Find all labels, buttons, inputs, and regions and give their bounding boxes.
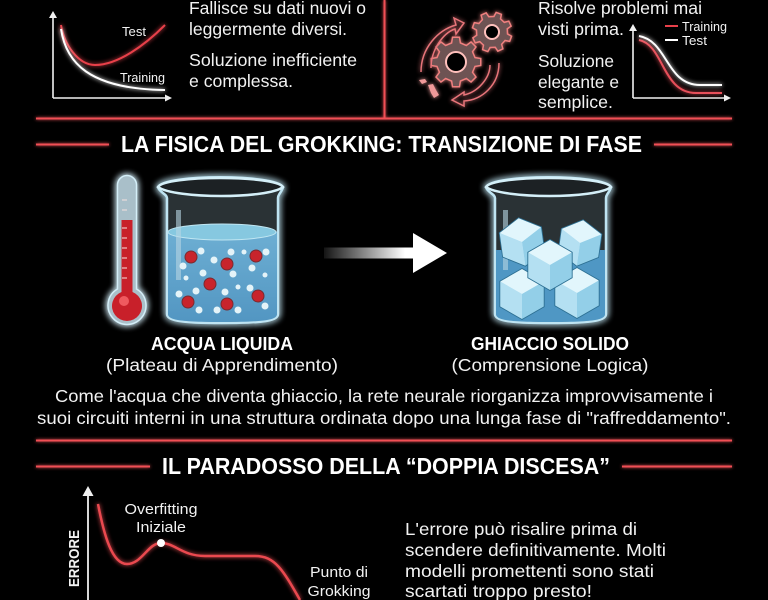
panel: grokking <box>419 0 731 112</box>
label: grokking point <box>308 564 370 600</box>
label: grokking point: Punto di <box>310 564 368 581</box>
axis label: error: ERRORE <box>66 530 83 587</box>
arrow: phase transition <box>324 233 447 273</box>
chart: training and test convergence: Training <box>682 19 727 34</box>
chart: test vs training overfitting: Training <box>120 70 165 85</box>
label: liquid water: (Plateau di Apprendimento) <box>106 355 338 375</box>
label: initial overfitting: Overfitting <box>124 501 198 518</box>
text: analogy paragraph: Come l'acqua che diventa ghiaccio, la rete neurale riorganizza improvvisamente i <box>55 386 713 406</box>
text: double descent explanation: L'errore può risalire prima di <box>405 519 637 539</box>
ice cubes <box>498 215 603 319</box>
label: solid ice: (Comprensione Logica) <box>452 355 648 375</box>
text: overfitting description <box>189 0 366 91</box>
icon: thermometer <box>108 176 146 324</box>
text: grokking description: semplice. <box>538 92 613 112</box>
label: initial overfitting <box>124 501 198 536</box>
icon: gears with arrows <box>419 7 517 106</box>
text: grokking description: elegante e <box>538 72 619 92</box>
chart: training and test convergence <box>629 19 731 102</box>
text: grokking description <box>538 0 702 112</box>
label: liquid water <box>106 334 338 375</box>
water <box>168 226 277 322</box>
text: grokking description: visti prima. <box>538 19 624 39</box>
text: overfitting description: Soluzione inefficiente <box>189 50 357 70</box>
label: solid ice: GHIACCIO SOLIDO <box>471 334 629 354</box>
panel: overfitting <box>49 0 366 102</box>
text: overfitting description: leggermente diversi. <box>189 19 347 39</box>
icon: beaker of ice cubes <box>486 177 611 323</box>
error curve <box>98 504 300 600</box>
frozen water <box>496 250 605 322</box>
text: double descent explanation <box>405 519 666 600</box>
heading: physics: LA FISICA DEL GROKKING: TRANSIZIONE DI FASE <box>121 131 642 157</box>
icon: beaker of liquid water <box>158 177 283 323</box>
label: liquid water: ACQUA LIQUIDA <box>151 334 293 354</box>
label: solid ice <box>452 334 648 375</box>
text: double descent explanation: scendere definitivamente. Molti <box>405 540 666 560</box>
hydrogen atoms <box>176 248 270 314</box>
text: grokking description: Soluzione <box>538 51 614 71</box>
label: grokking point: Grokking <box>308 583 370 600</box>
chart: training and test convergence: Test <box>682 33 707 48</box>
chart: test vs training overfitting <box>49 11 172 102</box>
text: double descent explanation: modelli promettenti sono stati <box>405 561 654 581</box>
divider lines top <box>36 0 732 118</box>
heading: double descent: IL PARADOSSO DELLA “DOPPIA DISCESA” <box>162 453 610 479</box>
text: overfitting description: e complessa. <box>189 71 293 91</box>
label: initial overfitting: Iniziale <box>136 519 186 536</box>
text: analogy paragraph: suoi circuiti interni in una struttura ordinata dopo una lunga fase di "raffreddamento". <box>37 408 731 428</box>
text: analogy paragraph <box>37 386 731 428</box>
chart: double descent error curve <box>66 486 370 600</box>
point: initial overfitting <box>157 539 165 547</box>
oxygen atoms <box>182 250 264 310</box>
chart: test vs training overfitting: Test <box>122 24 146 39</box>
